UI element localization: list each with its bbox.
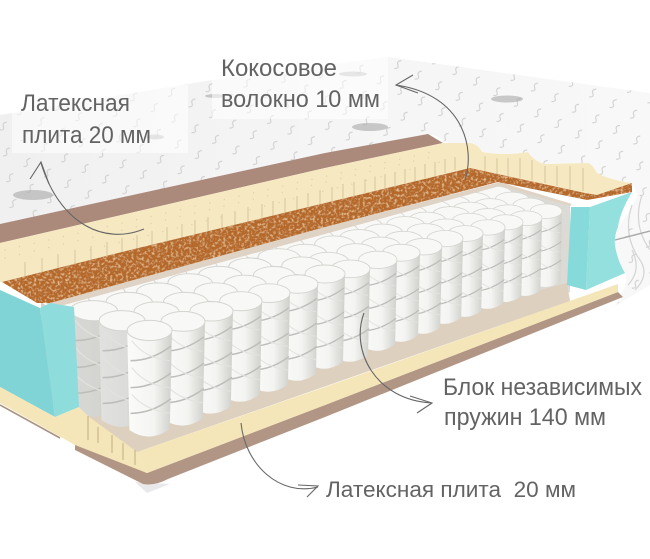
- label: coconut fibre: Кокосовое: [221, 55, 337, 82]
- bottom latex slab: [137, 284, 618, 473]
- arrow: spring block: [360, 313, 432, 413]
- tan base under springs: [79, 283, 570, 452]
- top latex slab: [0, 143, 632, 282]
- cover logos: [13, 72, 523, 200]
- label: bottom latex plate: Латексная плита 20 мм: [326, 477, 576, 502]
- left foam block: [0, 290, 79, 417]
- thread across peeled cover: [615, 231, 650, 240]
- label box: coconut fibre: [212, 45, 388, 119]
- peeled cover swirl: [628, 195, 650, 290]
- top brown layer: [0, 134, 443, 243]
- arrow: bottom latex plate: [241, 423, 318, 497]
- left bottom latex slab with ridges: [0, 387, 147, 473]
- label: coconut fibre: волокно 10 мм: [221, 86, 380, 113]
- bottom cover tip: [135, 482, 170, 493]
- label: spring block: [443, 374, 642, 431]
- label: top latex plate: Латексная: [21, 90, 130, 117]
- pocket spring block: [41, 173, 562, 437]
- spring base plate: [53, 186, 570, 452]
- bottom brown layer: [75, 292, 623, 484]
- arrow: coconut fibre: [396, 75, 468, 180]
- label: coconut fibre: [221, 55, 380, 113]
- top thin plate under coconut: [46, 182, 572, 308]
- label: spring block: Блок независимых: [443, 374, 642, 401]
- label: top latex plate: плита 20 мм: [22, 122, 151, 149]
- quilted mattress cover: [0, 57, 650, 307]
- label: spring block: пружин 140 мм: [444, 404, 606, 431]
- arrow: top latex plate: [30, 162, 144, 234]
- label box: top latex plate: [12, 85, 188, 153]
- coconut fibre layer: [2, 168, 632, 303]
- label: top latex plate: [21, 90, 151, 149]
- right foam block: [567, 192, 632, 290]
